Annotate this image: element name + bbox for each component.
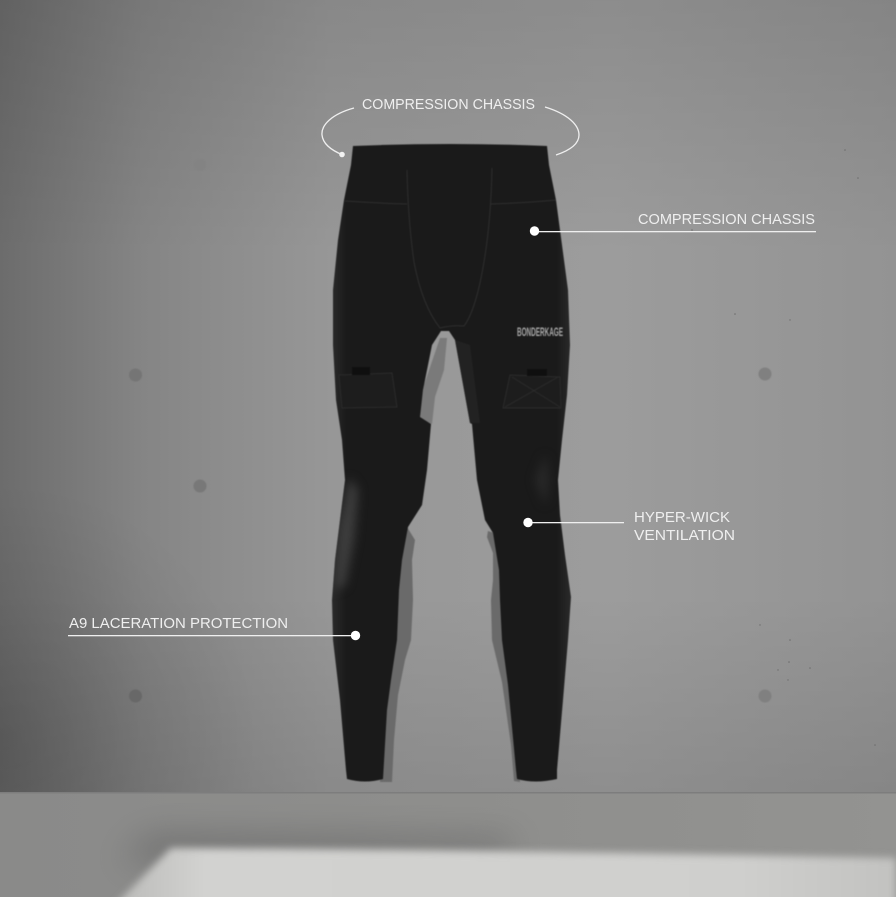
callout: waistband compression chassis bbox=[322, 96, 579, 157]
callout: hip compression chassis bbox=[530, 211, 816, 236]
compression pants bbox=[332, 144, 571, 782]
garment seams bbox=[345, 168, 556, 328]
callout: waistband compression chassis: COMPRESSION CHASSIS bbox=[362, 96, 535, 113]
callout: hip compression chassis: COMPRESSION CHASSIS bbox=[638, 211, 815, 228]
left leg pocket bbox=[339, 367, 397, 408]
knee shading bbox=[334, 470, 547, 588]
black garment body bbox=[332, 144, 571, 782]
callout: hyper-wick ventilation bbox=[523, 509, 735, 544]
callout: a9 laceration protection bbox=[68, 615, 360, 640]
callout: hyper-wick ventilation: HYPER-WICK bbox=[634, 509, 730, 526]
grey inner thigh panel bbox=[419, 338, 447, 424]
callout: a9 laceration protection: A9 LACERATION PROTECTION bbox=[69, 615, 288, 632]
right leg pocket bbox=[503, 369, 561, 408]
background: floor bbox=[0, 792, 896, 897]
callout: hyper-wick ventilation: VENTILATION bbox=[634, 527, 735, 544]
brand logo: BONDERKAGE bbox=[517, 325, 563, 339]
grey right calf panel bbox=[487, 531, 520, 782]
grey left calf panel bbox=[380, 527, 415, 782]
